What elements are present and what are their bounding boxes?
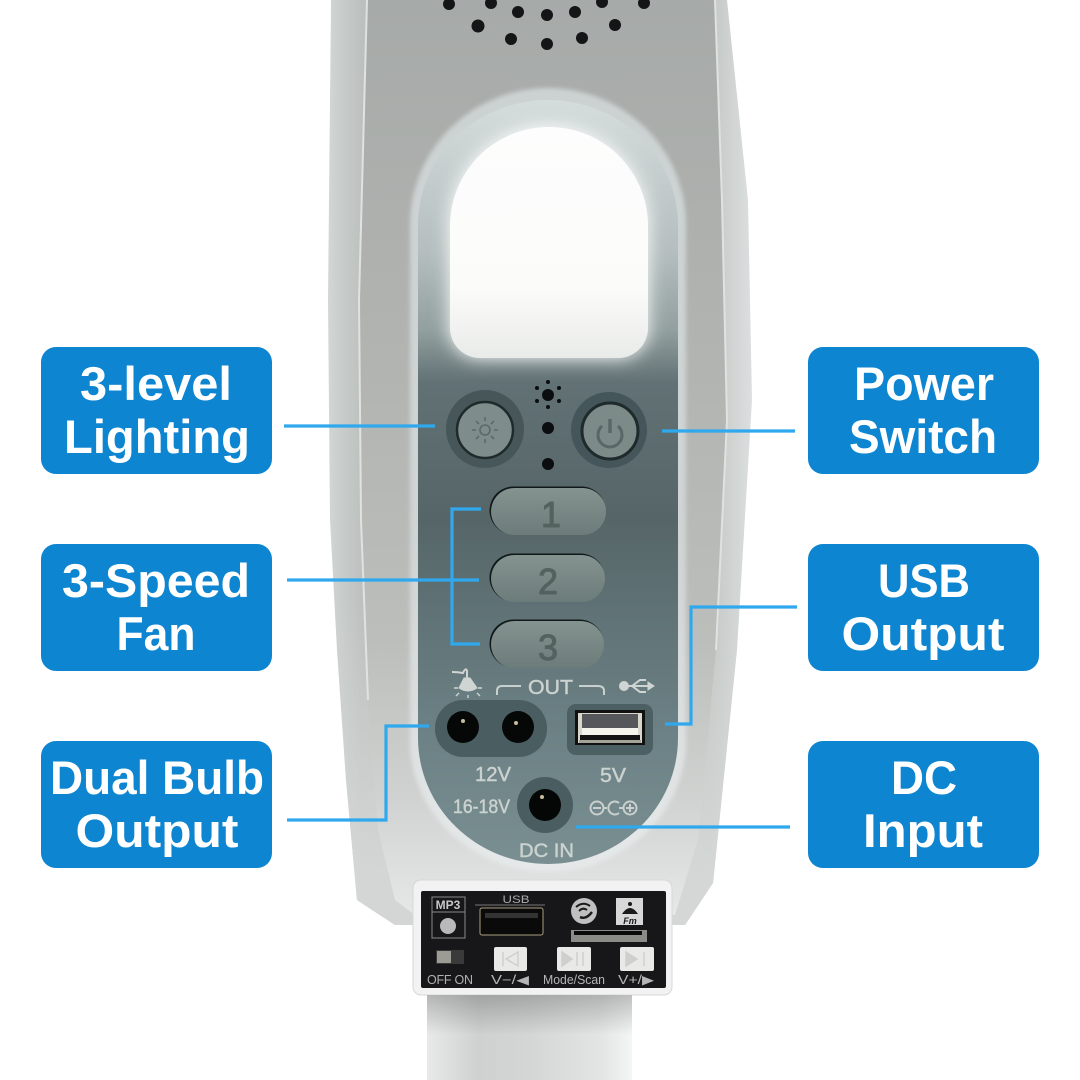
label: DC Input <box>808 741 1039 868</box>
label: DC Input: Input <box>863 804 983 857</box>
mode button: Mode/Scan <box>543 973 605 987</box>
connector: lighting <box>284 424 435 428</box>
usb slot <box>475 894 545 935</box>
label: Dual Bulb Output: Output <box>76 804 239 857</box>
label: USB Output <box>808 544 1039 671</box>
mode button <box>543 947 605 987</box>
label: Dual Bulb Output: Dual Bulb <box>50 751 264 804</box>
module bezel <box>413 880 672 995</box>
control panel <box>410 88 686 872</box>
device: front plate <box>359 0 727 915</box>
previous button: V−/◀ <box>491 973 529 987</box>
label: 3-level Lighting: Lighting <box>64 410 250 463</box>
label: DC Input: DC <box>891 751 957 804</box>
label: Dual Bulb Output <box>41 741 272 868</box>
power switch <box>427 950 473 987</box>
voltage labels: 12V <box>475 764 512 786</box>
label: Power Switch: Switch <box>849 410 997 463</box>
fan speed button 1: 1 <box>541 494 561 535</box>
speaker holes <box>443 0 650 50</box>
usb output port <box>567 704 653 755</box>
lamp window <box>450 127 648 358</box>
device: stand stem <box>427 995 632 1080</box>
label: USB Output: USB <box>878 554 970 607</box>
dc input port <box>517 777 573 833</box>
next button <box>618 947 654 987</box>
card slot <box>571 930 647 942</box>
fan speed button 3: 3 <box>538 627 558 668</box>
label: Power Switch: Power <box>854 357 994 410</box>
button: power <box>571 392 647 468</box>
fm icon <box>616 898 643 926</box>
label: USB Output: Output <box>842 607 1005 660</box>
button: lighting <box>446 390 524 468</box>
mp3 button: MP3 <box>436 898 461 912</box>
label: 3-Speed Fan: Fan <box>116 607 196 660</box>
device: rear shell <box>328 0 752 925</box>
fm icon: Fm <box>623 916 637 926</box>
label: 3-level Lighting <box>41 347 272 474</box>
fan speed button 1 <box>490 486 606 535</box>
next button: V+/▶ <box>618 973 654 987</box>
icon: dc polarity <box>590 802 636 814</box>
module face <box>421 891 666 988</box>
voltage labels: DC IN <box>519 841 574 862</box>
label: 3-level Lighting: 3-level <box>80 357 232 410</box>
usb slot: USB <box>502 894 530 906</box>
fan speed button 3 <box>490 620 604 668</box>
power switch: OFF ON <box>427 973 473 987</box>
label: OUT bracket <box>497 677 604 699</box>
connector: power <box>662 429 795 433</box>
label: 3-Speed Fan <box>41 544 272 671</box>
voltage labels <box>453 764 627 862</box>
voltage labels: 5V <box>600 765 627 787</box>
label: Power Switch <box>808 347 1039 474</box>
icon: usb symbol <box>620 680 654 692</box>
label: OUT bracket: OUT <box>528 677 573 699</box>
fan speed button 2: 2 <box>538 561 558 602</box>
wifi icon <box>571 898 597 924</box>
previous button <box>491 947 529 987</box>
mp3 button <box>432 897 465 938</box>
connector: usb <box>665 607 797 724</box>
label: 3-Speed Fan: 3-Speed <box>62 554 250 607</box>
indicator lights <box>535 380 561 470</box>
icon: bulb <box>452 669 482 698</box>
voltage labels: 16-18V <box>453 797 510 818</box>
fan speed button 2 <box>490 554 605 602</box>
connector: dual bulb <box>287 726 429 820</box>
dual bulb output ports <box>435 700 547 757</box>
connector: dc <box>576 825 790 829</box>
connector: fan <box>287 509 481 644</box>
mp3 module <box>413 880 672 995</box>
